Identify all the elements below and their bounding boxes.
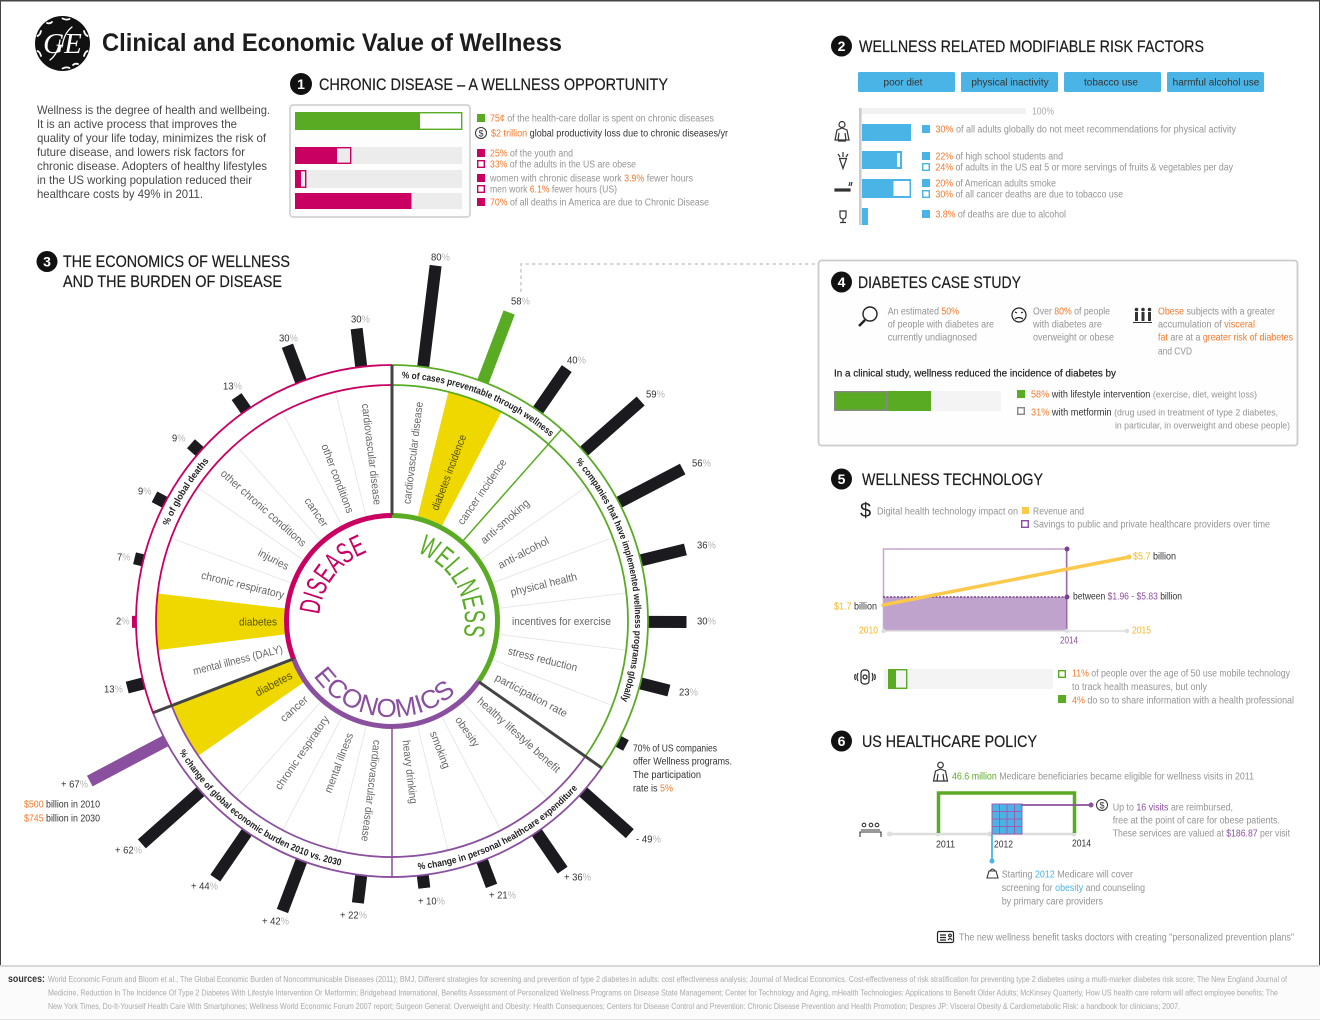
chart: policy timeline: 2014 [1072, 838, 1091, 850]
slice labels: economics: chronic respiratory [273, 713, 332, 792]
value labels: disease: 7% [117, 552, 131, 564]
icon: meeting [860, 823, 881, 837]
value labels: disease [104, 314, 370, 696]
section separators [153, 365, 602, 877]
slice labels: disease: diabetes [239, 616, 277, 629]
value labels: wellness: 59% [646, 390, 665, 400]
hub labels: ECONOMICS [314, 666, 454, 718]
heading: section 2: WELLNESS RELATED MODIFIABLE RISK FACTORS [859, 38, 1204, 56]
connector: dotted line to diabetes case study [521, 264, 820, 292]
slice labels: disease: injuries [256, 547, 291, 573]
icon: document [938, 932, 954, 942]
heading: section 6: US HEALTHCARE POLICY [862, 733, 1037, 751]
chart: radial wellness wheel [24, 252, 732, 928]
heading: section 6 [831, 730, 1037, 752]
slice labels: disease: other chronic conditions [218, 468, 309, 550]
panel: section 2 risk factors [831, 36, 1264, 225]
legend: risk factors: 24% of adults in the US eat 5 or more servings of fruits & vegetables per day [936, 162, 1233, 174]
callout: US companies: The participation [633, 770, 701, 781]
chart: revenue vs savings: $5.7 billion [1133, 552, 1176, 562]
legend: chronic disease: $2 trillion global productivity loss due to chronic diseases/yr [491, 128, 729, 140]
value labels: economics: - 49% [636, 834, 661, 846]
intro text block [37, 103, 270, 201]
slice labels: economics: cancer [278, 694, 311, 725]
legend: clinical study: 31% with metformin (drug used in treatment of type 2 diabetes, [1031, 408, 1278, 418]
slice labels: disease: cancer [301, 496, 330, 530]
value labels: wellness: 80% [431, 252, 450, 264]
icon: candles [1133, 308, 1152, 323]
text block: visceral fat: accumulation of visceral [1158, 320, 1255, 330]
text block: screening: Starting 2012 Medicare will cover [1002, 870, 1134, 880]
slice labels: wellness [401, 401, 611, 720]
slice labels: economics [254, 670, 562, 842]
text: clinical study: In a clinical study, wellness reduced the incidence of diabetes by [834, 368, 1116, 380]
value labels: economics: + 44% [191, 882, 218, 892]
slice labels: disease: chronic respiratory [200, 570, 286, 602]
slice labels: economics: heavy drinking [399, 740, 419, 805]
value labels: wellness: 36% [697, 540, 716, 552]
risk factor tags: poor diet [884, 78, 923, 88]
value labels: wellness [431, 252, 716, 698]
hub labels [300, 534, 486, 718]
heading: section 6: 6 [838, 733, 846, 749]
text block: undiagnosed: An estimated 50% [888, 306, 959, 318]
intro text block: Wellness is the degree of health and wellbeing. [37, 103, 270, 117]
chart: policy timeline: 2011 [936, 840, 955, 850]
callout: diabetes economic burden: $500 billion in 2010 [24, 800, 100, 810]
value labels: economics: + 67% [61, 780, 88, 790]
risk factor tags: physical inactivity [971, 78, 1049, 88]
slice labels: wellness: participation rate [493, 672, 569, 720]
value labels: wellness: 58% [511, 296, 530, 308]
slice labels: wellness: anti-smoking [479, 497, 532, 547]
icon: cigarette [835, 182, 852, 191]
panel: section 1 chronic disease [290, 73, 729, 217]
value labels: wellness: 56% [692, 458, 711, 470]
bar chart: risk factors: 100% [1032, 106, 1054, 118]
slice labels: disease [192, 403, 383, 678]
legend: risk factors [922, 124, 1236, 220]
legend: mobile technology [1058, 668, 1294, 706]
intro text block: It is an active process that improves the [37, 117, 237, 131]
heading: section 5: WELLNESS TECHNOLOGY [862, 471, 1043, 489]
slice labels: wellness: physical health [509, 571, 578, 599]
text block: visits [1113, 802, 1290, 840]
icon: scale [987, 869, 998, 878]
value labels: wellness: 30% [697, 616, 716, 628]
legend: chronic disease [476, 114, 729, 208]
legend: chronic disease: 70% of all deaths in America are due to Chronic Disease [490, 198, 709, 208]
legend: mobile technology: 4% do so to share information with a health professional [1072, 696, 1294, 706]
legend: chronic disease: 75¢ of the health-care dollar is spent on chronic diseases [490, 114, 714, 124]
value labels: economics: + 36% [564, 872, 591, 884]
value labels: wellness: 23% [679, 688, 698, 698]
legend: risk factors: 30% of all cancer deaths are due to tobacco use [936, 190, 1123, 200]
chart: revenue vs savings: 2010 [859, 626, 878, 636]
legend: risk factors: 22% of high school students and [936, 152, 1063, 162]
chart: revenue vs savings: between $1.96 - $5.83 billion [1073, 592, 1182, 602]
legend: mobile technology: 11% of people over the age of 50 use mobile technology [1072, 668, 1290, 680]
text: medicare beneficiaries: 46.6 million Medicare beneficiaries became eligible for wellness visits in 2011 [952, 772, 1254, 782]
text block: screening: screening for obesity and counseling [1002, 883, 1145, 894]
chart: revenue vs savings: 2015 [1132, 626, 1151, 636]
risk factor tags: harmful alcohol use [1173, 78, 1260, 88]
slice labels: economics: mental illness [323, 731, 356, 795]
legend: digital health [877, 506, 1270, 530]
value labels: economics: + 62% [115, 846, 142, 856]
value labels: disease: 2% [116, 616, 130, 628]
intro text block: future disease, and lowers risk factors for [37, 145, 245, 159]
icon: person [835, 122, 849, 141]
ring labels: % change of global economic burden 2010 vs. 2030 [180, 749, 342, 866]
value labels: disease: 30% [351, 314, 370, 326]
slice labels: disease: cardiovascular disease [359, 403, 383, 506]
panel: sources: sources: [8, 974, 45, 985]
heading: section 1 [290, 73, 668, 95]
slice labels: wellness: incentives for exercise [512, 616, 611, 628]
logo: GE monogram: GE [43, 28, 82, 60]
legend: chronic disease: men work 6.1% fewer hours (US) [490, 184, 617, 196]
icon: magnifier [859, 307, 877, 326]
value labels: disease: 13% [223, 382, 242, 392]
text block: overweight: Over 80% of people [1033, 306, 1110, 318]
heading: section 3: THE ECONOMICS OF WELLNESS [63, 253, 290, 271]
callout: diabetes economic burden [24, 800, 100, 824]
value labels: disease: 30% [279, 334, 298, 344]
ring labels: % of cases preventable through wellness [402, 372, 553, 436]
panel: section 4 diabetes case study [818, 260, 1298, 446]
panel: section 6 US healthcare policy [831, 730, 1294, 944]
heading: section 5 [831, 468, 1043, 490]
slice labels: wellness: cancer incidence [456, 457, 509, 527]
panel: sources [0, 965, 1320, 1020]
text block: overweight [1032, 306, 1114, 344]
chart: revenue vs savings: 2014 [1060, 636, 1078, 646]
risk factor tags: tobacco use [1084, 78, 1138, 88]
text block: undiagnosed [888, 306, 994, 344]
legend: chronic disease: women with chronic disease work 3.9% fewer hours [489, 174, 693, 184]
bar chart: mobile technology [884, 669, 1053, 689]
slice labels: wellness: cardiovascular disease [401, 401, 426, 505]
legend: chronic disease: $ [478, 128, 484, 138]
heading: section 3: AND THE BURDEN OF DISEASE [63, 273, 282, 291]
ring labels: % of global deaths [162, 458, 208, 525]
icon: wine glass [840, 211, 846, 222]
text block: screening: by primary care providers [1002, 896, 1103, 908]
callout: US companies [633, 744, 732, 794]
value labels: wellness: 40% [567, 356, 586, 366]
hub labels: DISEASE [300, 534, 366, 614]
callout: diabetes economic burden: $745 billion in 2030 [24, 814, 100, 824]
value labels: disease: 13% [104, 684, 123, 696]
legend: risk factors: 30% of all adults globally do not meet recommendations for physical activity [936, 124, 1236, 136]
slice labels: disease: mental illness (DALY) [192, 644, 284, 678]
value labels: economics: + 21% [489, 890, 516, 902]
slice dividers [171, 392, 626, 850]
icon: dollar coin [1096, 800, 1108, 810]
icon: dollar coin: $ [1099, 800, 1105, 810]
hub labels: WELLNESS [420, 534, 486, 637]
callout: US companies: rate is 5% [633, 784, 673, 794]
slice labels: economics: cardiovascular disease [358, 739, 383, 842]
heading: section 3 [36, 251, 290, 291]
highlighted wedges: diabetes [153, 382, 631, 860]
legend: risk factors: 20% of American adults smoke [936, 178, 1056, 190]
text block: overweight: overweight or obese [1033, 332, 1114, 344]
text block: visits: free at the point of care for obese patients. [1113, 816, 1280, 826]
callout: US companies: offer Wellness programs. [633, 756, 732, 768]
legend: mobile technology: to track health measures, but only [1072, 682, 1207, 693]
legend: clinical study: 58% with lifestyle intervention (exercise, diet, weight loss) [1031, 390, 1257, 400]
radial bars: wellness [417, 265, 687, 751]
title: Clinical and Economic Value of Wellness [102, 29, 562, 57]
text block: screening [1002, 870, 1145, 908]
text block: visits: These services are valued at $186.87 per visit [1113, 828, 1290, 840]
intro text block: chronic disease. Adopters of healthy lifestyles [37, 159, 267, 173]
text block: visceral fat: and CVD [1158, 346, 1192, 358]
slice labels: wellness: anti-alcohol [496, 535, 551, 572]
radial bars: disease [126, 328, 367, 693]
rings [35, 264, 749, 978]
value labels: economics: + 22% [340, 910, 367, 922]
ring labels [162, 372, 642, 870]
legend: digital health: Digital health technology impact on [877, 506, 1018, 518]
value labels: economics: + 10% [418, 896, 445, 908]
logo: GE monogram [35, 16, 90, 71]
heading: section 4 [831, 272, 1021, 292]
text block: undiagnosed: currently undiagnosed [888, 332, 977, 344]
legend: chronic disease: 33% of the adults in the US are obese [490, 160, 636, 170]
value labels: disease: 9% [172, 434, 186, 444]
heading: section 4: DIABETES CASE STUDY [858, 274, 1021, 292]
heading: section 2: 2 [838, 38, 846, 54]
slice labels: disease: other conditions [318, 443, 356, 515]
chart: revenue vs savings [834, 546, 1182, 646]
slice labels: economics: obesity [452, 715, 482, 750]
legend: clinical study [1017, 390, 1290, 432]
chart: policy timeline: 2012 [994, 840, 1013, 850]
ring labels: % change in personal healthcare expenditure [418, 786, 577, 870]
icon: carrot [838, 152, 848, 168]
text block: visits: Up to 16 visits are reimbursed, [1113, 802, 1233, 814]
heading: section 4: 4 [838, 274, 846, 290]
heading: section 1: 1 [297, 76, 305, 92]
panel: section 5 wellness technology [831, 468, 1294, 706]
text block: visceral fat [1158, 306, 1293, 358]
slice labels: economics: smoking [427, 730, 452, 770]
text block: visceral fat: Obese subjects with a greater [1158, 306, 1276, 318]
icon: person [934, 762, 948, 781]
icon: mobile device [855, 670, 875, 684]
ring labels: % companies that have implemented wellness programs globally [576, 458, 642, 702]
callout: US companies: 70% of US companies [633, 744, 717, 754]
chart: policy timeline [887, 793, 1094, 864]
text block: visceral fat: fat are at a greater risk of diabetes [1158, 332, 1293, 344]
heading: section 5: 5 [838, 471, 846, 487]
intro text block: in the US working population reduced their [37, 173, 252, 187]
heading: section 1: CHRONIC DISEASE – A WELLNESS OPPORTUNITY [319, 76, 668, 94]
risk factor tags [858, 72, 1264, 92]
text block: overweight: with diabetes are [1032, 320, 1102, 330]
bar chart: clinical study [834, 391, 1001, 411]
chart: revenue vs savings: $1.7 billion [834, 602, 877, 612]
legend: digital health: Revenue and [1033, 506, 1084, 518]
slice labels: economics: diabetes [254, 670, 295, 699]
intro text block: quality of your life today, minimizes the risk of [37, 131, 267, 145]
legend: risk factors: 3.8% of deaths are due to alcohol [936, 210, 1066, 220]
text block: undiagnosed: of people with diabetes are [888, 320, 994, 330]
value labels: disease: 9% [138, 486, 152, 498]
legend: clinical study: in particular, in overweight and obese people) [1115, 420, 1290, 432]
icon: dollar: $ [860, 500, 871, 522]
bar chart: chronic disease bars [290, 105, 470, 217]
legend: chronic disease: 25% of the youth and [490, 148, 573, 160]
icon: face [1012, 308, 1026, 322]
value labels: economics [61, 780, 661, 928]
slice labels: economics: healthy lifestyle benefit [475, 695, 562, 776]
legend: digital health: Savings to public and private healthcare providers over time [1033, 520, 1270, 530]
bar chart: risk factors [859, 106, 1054, 225]
intro text block: healthcare costs by 49% in 2011. [37, 187, 203, 201]
slice labels: wellness: diabetes incidence [430, 433, 469, 512]
value labels: economics: + 42% [262, 916, 289, 928]
radial bars: economics [87, 735, 634, 913]
heading: section 3: 3 [43, 254, 51, 270]
slice labels: wellness: stress reduction [507, 645, 578, 674]
